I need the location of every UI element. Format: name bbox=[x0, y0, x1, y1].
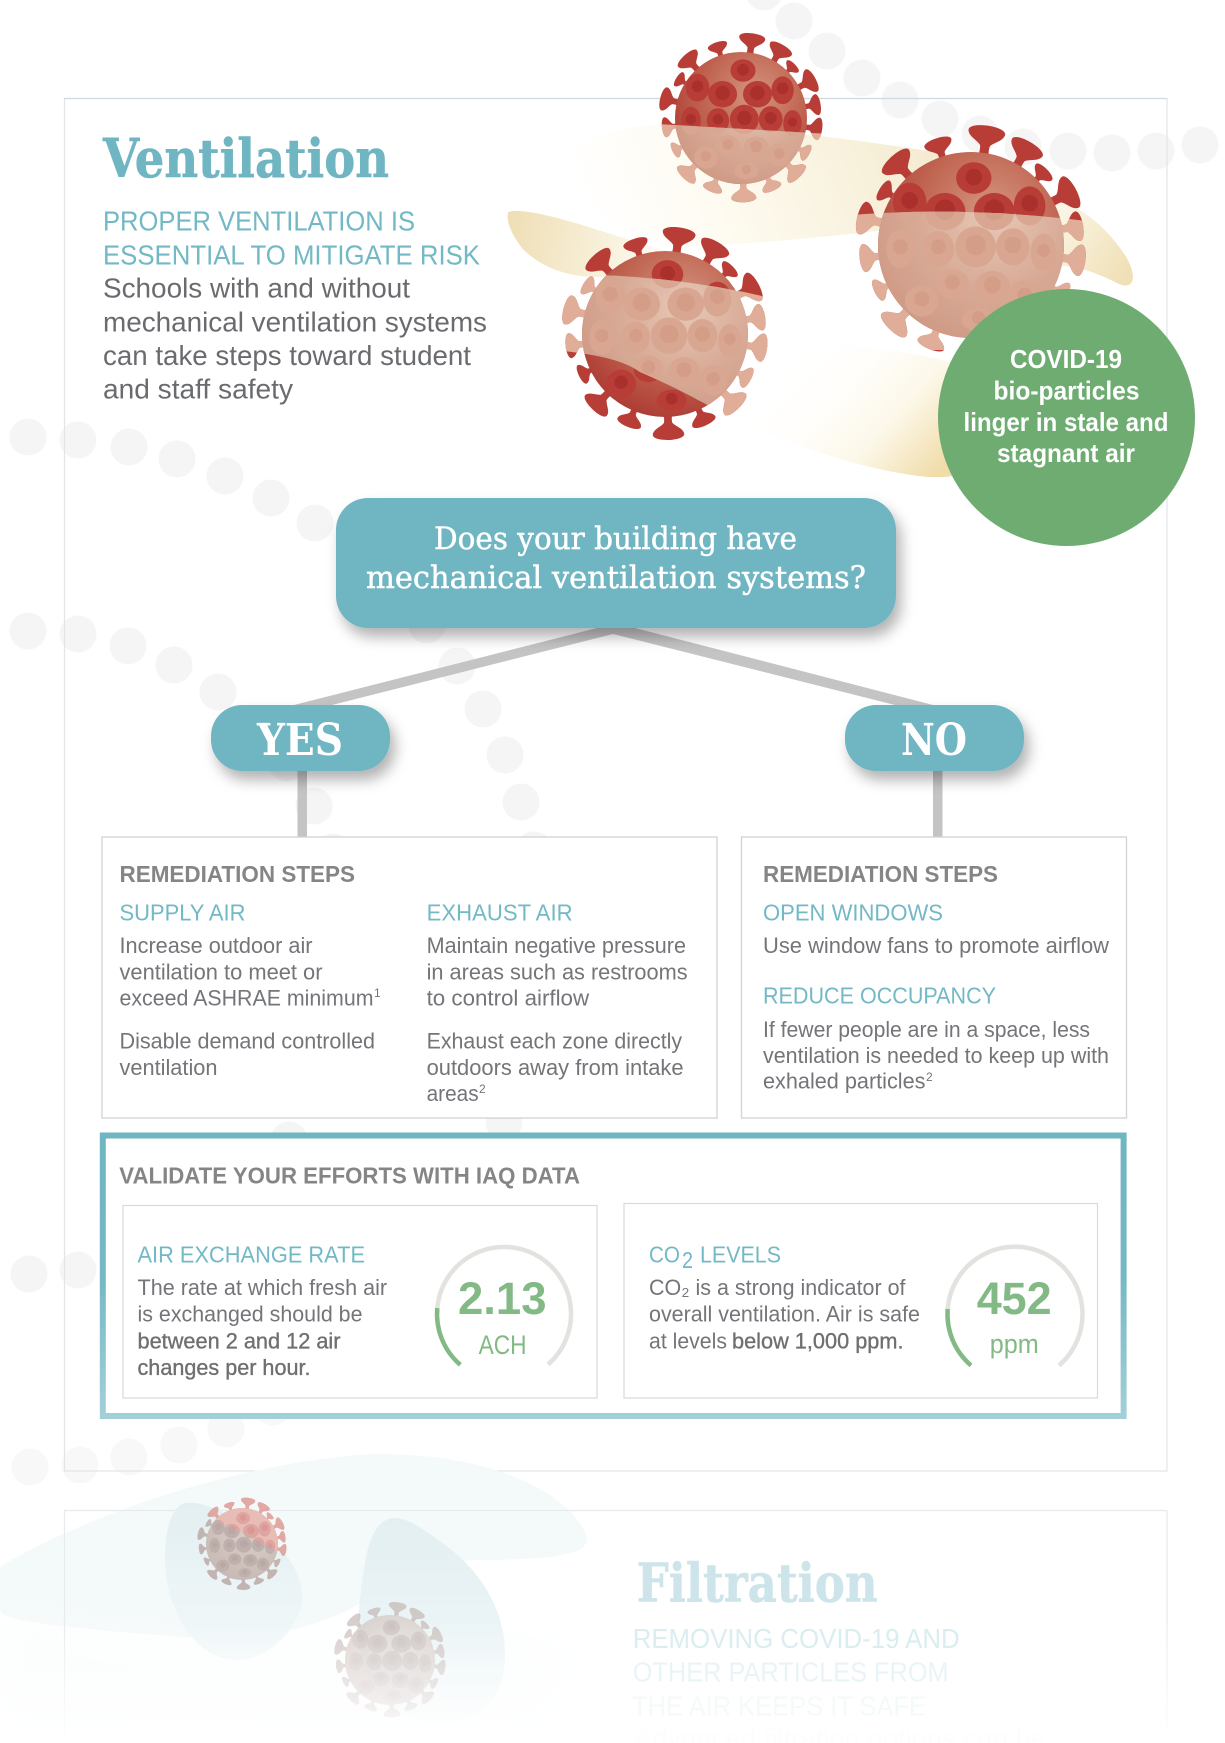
column: supply air: SUPPLY AIR bbox=[120, 900, 246, 926]
block: reduce occupancy: 2 bbox=[926, 1070, 933, 1084]
blob: left lobe bbox=[165, 1503, 302, 1660]
intro subheading bbox=[103, 206, 481, 270]
column: supply air: Disable demand controlled bbox=[120, 1028, 375, 1054]
card: co2 levels bbox=[624, 1204, 1098, 1398]
filtration text: THE AIR KEEPS IT SAFE bbox=[632, 1691, 926, 1722]
intro text: and staff safety bbox=[103, 373, 293, 404]
card: air exchange rate bbox=[123, 1206, 597, 1398]
card: co2 levels: LEVELS bbox=[700, 1242, 781, 1268]
callout: green circle: linger in stale and bbox=[964, 407, 1168, 437]
gauge: ACH bbox=[437, 1247, 571, 1365]
column: supply air: Increase outdoor air bbox=[120, 933, 312, 958]
column: supply air: 1 bbox=[374, 986, 381, 1000]
no pill: NO bbox=[901, 715, 967, 766]
gauge: ppm: 452 bbox=[977, 1273, 1052, 1324]
column: exhaust air: EXHAUST AIR bbox=[427, 900, 573, 926]
callout: green circle: stagnant air bbox=[997, 438, 1135, 468]
icon: virus lower left bbox=[560, 225, 769, 441]
gauge: ACH: 2.13 bbox=[458, 1273, 546, 1324]
panel: remediation no bbox=[742, 837, 1126, 1118]
card: co2 levels: at levels bbox=[649, 1328, 727, 1353]
card: co2 levels: below 1,000 ppm. bbox=[732, 1328, 904, 1353]
column: exhaust air: Maintain negative pressure bbox=[427, 933, 686, 958]
callout: green circle bbox=[938, 289, 1195, 546]
blob: pale blue air bbox=[0, 1454, 587, 1743]
heading: validate: VALIDATE YOUR EFFORTS WITH IAQ DATA bbox=[119, 1162, 580, 1188]
block: open windows: Use window fans to promote airflow bbox=[763, 933, 1109, 958]
wave: stale air swoosh bbox=[508, 125, 1133, 477]
gauge: ACH: ACH bbox=[479, 1330, 527, 1360]
intro subheading: PROPER VENTILATION IS bbox=[103, 206, 415, 237]
intro text: Schools with and without bbox=[103, 273, 410, 304]
question box: Does your building have bbox=[434, 521, 797, 557]
filtration text: REMOVING COVID-19 AND bbox=[633, 1623, 960, 1654]
question box bbox=[336, 498, 896, 628]
card: air exchange rate: AIR EXCHANGE RATE bbox=[138, 1242, 365, 1268]
icon: faded virus lower bbox=[333, 1601, 446, 1718]
card: co2 levels: CO bbox=[649, 1242, 680, 1268]
card: co2 levels: CO₂ is a strong indicator of bbox=[649, 1275, 906, 1300]
callout: green circle: bio-particles bbox=[994, 376, 1140, 406]
column: exhaust air: areas bbox=[427, 1081, 479, 1106]
panel: validate with IAQ data bbox=[103, 1136, 1124, 1416]
card: co2 levels: 2 bbox=[682, 1247, 693, 1273]
panel: remediation yes bbox=[102, 837, 717, 1118]
card: air exchange rate: The rate at which fresh air bbox=[138, 1275, 387, 1300]
block: open windows: OPEN WINDOWS bbox=[763, 900, 943, 926]
heading: filtration: Filtration bbox=[637, 1553, 878, 1615]
filtration text: OTHER PARTICLES FROM bbox=[633, 1657, 949, 1688]
icon: virus right bbox=[853, 123, 1088, 364]
intro text bbox=[103, 273, 487, 404]
card: air exchange rate: changes per hour. bbox=[138, 1355, 310, 1380]
intro text: can take steps toward student bbox=[103, 340, 471, 371]
gauge: ppm: ppm bbox=[990, 1329, 1039, 1359]
blob: right lobe bbox=[358, 1518, 505, 1723]
callout: green circle: COVID-19 bbox=[1010, 344, 1122, 374]
heading: remediation steps no: REMEDIATION STEPS bbox=[763, 861, 998, 887]
connector lines bbox=[290, 628, 942, 837]
column: exhaust air: in areas such as restrooms bbox=[427, 960, 688, 985]
card: co2 levels: overall ventilation. Air is safe bbox=[649, 1302, 920, 1327]
block: open windows bbox=[763, 900, 1109, 958]
column: exhaust air: 2 bbox=[479, 1082, 486, 1096]
card: air exchange rate: is exchanged should be bbox=[138, 1302, 362, 1327]
fade overlay bbox=[0, 1620, 1225, 1743]
filtration text bbox=[632, 1623, 1046, 1743]
column: exhaust air: outdoors away from intake bbox=[427, 1055, 684, 1080]
block: reduce occupancy bbox=[763, 983, 1109, 1094]
block: reduce occupancy: exhaled particles bbox=[763, 1069, 926, 1094]
column: exhaust air: Exhaust each zone directly bbox=[427, 1028, 682, 1054]
column: supply air: ventilation bbox=[120, 1055, 218, 1080]
column: supply air: ventilation to meet or bbox=[120, 960, 322, 985]
panel: filtration bbox=[64, 1510, 1167, 1735]
column: supply air: exceed ASHRAE minimum bbox=[120, 986, 374, 1011]
gauge: ppm bbox=[947, 1247, 1082, 1365]
no pill bbox=[845, 705, 1024, 771]
icon: virus top bbox=[657, 32, 824, 203]
block: reduce occupancy: REDUCE OCCUPANCY bbox=[763, 983, 996, 1009]
title: Ventilation bbox=[102, 128, 389, 190]
column: exhaust air: to control airflow bbox=[427, 986, 589, 1011]
column: exhaust air bbox=[427, 900, 688, 1106]
block: reduce occupancy: ventilation is needed to keep up with bbox=[763, 1043, 1109, 1068]
heading: remediation steps: REMEDIATION STEPS bbox=[120, 861, 355, 887]
block: reduce occupancy: If fewer people are in a space, less bbox=[763, 1017, 1090, 1042]
icon: faded virus upper bbox=[196, 1497, 287, 1590]
card: air exchange rate: between 2 and 12 air bbox=[138, 1328, 340, 1353]
panel: ventilation bbox=[64, 98, 1167, 1471]
column: supply air bbox=[120, 900, 381, 1080]
intro text: mechanical ventilation systems bbox=[103, 307, 487, 338]
question box: mechanical ventilation systems? bbox=[366, 560, 866, 596]
yes pill bbox=[211, 705, 390, 771]
yes pill: YES bbox=[256, 715, 343, 766]
intro subheading: ESSENTIAL TO MITIGATE RISK bbox=[103, 239, 481, 270]
